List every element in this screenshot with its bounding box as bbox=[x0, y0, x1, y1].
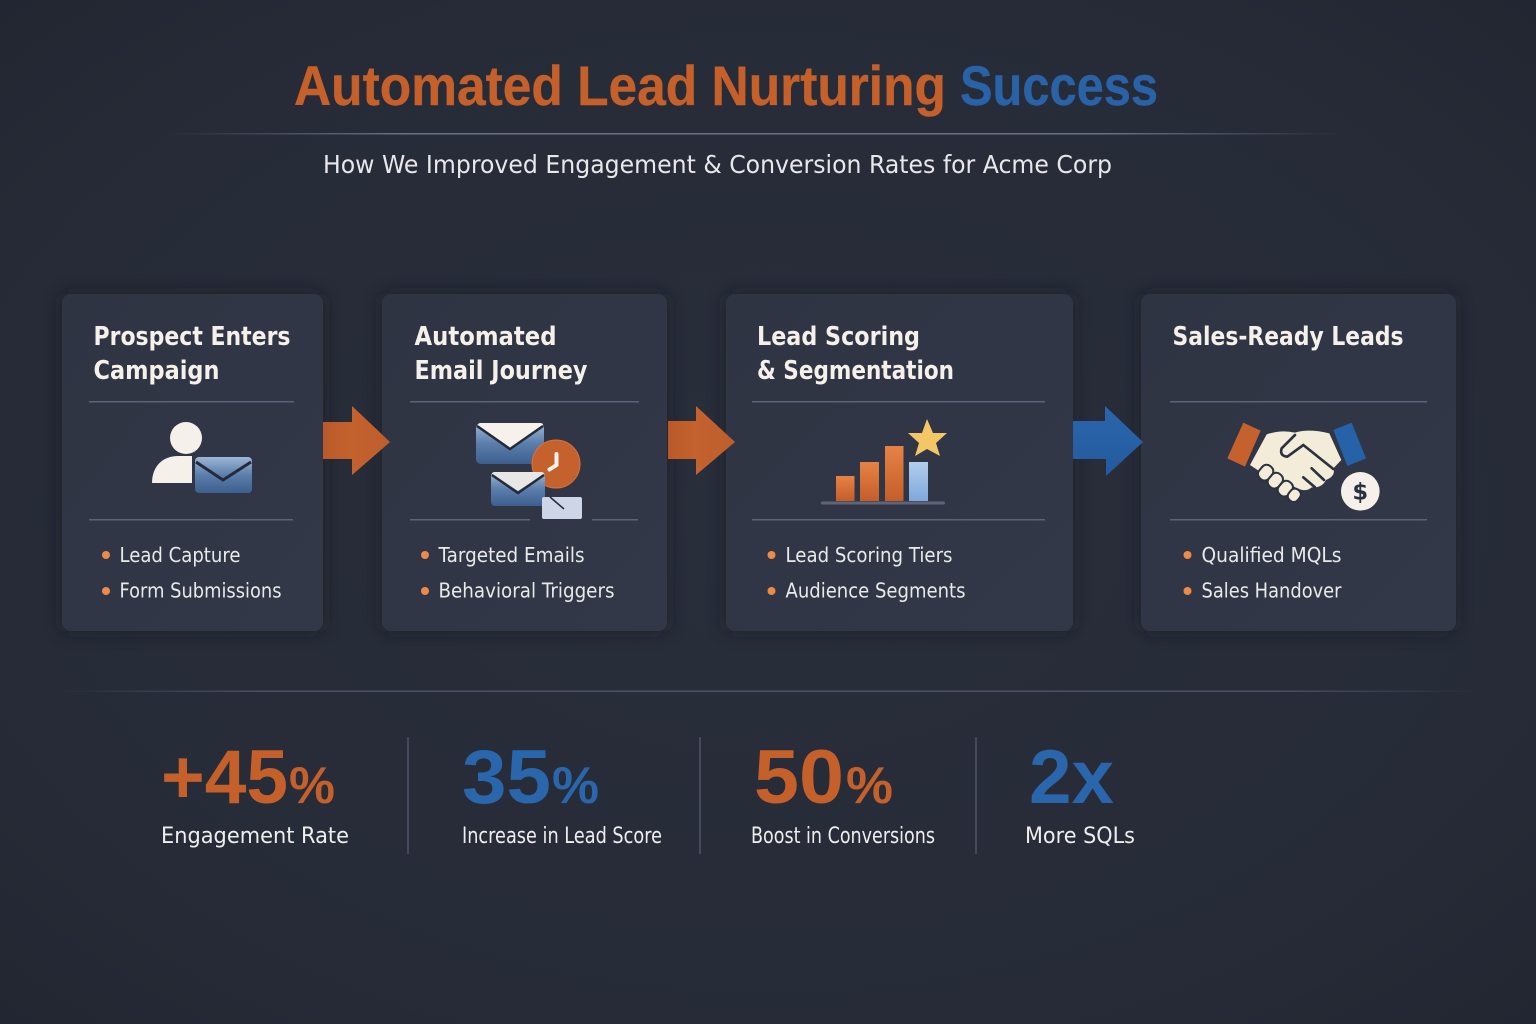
subtitle: How We Improved Engagement & Conversion Rates for Acme Corp bbox=[323, 150, 1112, 179]
heading: Lead Scoring & Segmentation: Lead Scoring bbox=[757, 322, 920, 352]
list: card 3 bullets: Audience Segments bbox=[786, 578, 966, 602]
panel: Sales-Ready Leads bbox=[1141, 294, 1456, 631]
list: card 2 bullets: Targeted Emails bbox=[438, 543, 584, 567]
stat: 35% Increase in Lead Score: Increase in Lead Score bbox=[462, 824, 662, 849]
list: card 1 bullets: Lead Capture bbox=[120, 543, 240, 567]
heading: Automated Email Journey: Email Journey bbox=[414, 356, 588, 386]
stat: +45% Engagement Rate: +45 bbox=[161, 735, 288, 820]
icon: handshake with dollar coin bbox=[1227, 423, 1380, 511]
list: card 2 bullets: Behavioral Triggers bbox=[438, 578, 614, 602]
list: card 3 bullets bbox=[768, 543, 966, 602]
heading: Lead Scoring & Segmentation bbox=[757, 322, 954, 386]
stat: 35% Increase in Lead Score bbox=[462, 735, 662, 849]
stat: 2x More SQLs: 2x bbox=[1029, 735, 1114, 820]
heading: Prospect Enters Campaign: Prospect Enters bbox=[94, 322, 290, 352]
title: Automated Lead Nurturing bbox=[294, 54, 946, 117]
heading: Lead Scoring & Segmentation: & Segmentation bbox=[757, 356, 954, 386]
list: card 4 bullets bbox=[1184, 543, 1342, 602]
stat: +45% Engagement Rate: Engagement Rate bbox=[161, 824, 349, 849]
list: card 1 bullets: Form Submissions bbox=[120, 578, 282, 602]
stat: 2x More SQLs bbox=[1025, 735, 1135, 849]
icon: bar chart with star bbox=[821, 419, 947, 504]
card shadows bbox=[62, 294, 1455, 631]
stat: 50% Boost in Conversions: 50 bbox=[754, 735, 844, 820]
stat: 50% Boost in Conversions: Boost in Conversions bbox=[751, 824, 935, 849]
list: card 4 bullets: Qualified MQLs bbox=[1202, 543, 1342, 567]
stat: 2x More SQLs: More SQLs bbox=[1025, 824, 1135, 849]
title: Success bbox=[960, 54, 1158, 117]
heading: Prospect Enters Campaign: Campaign bbox=[94, 356, 220, 386]
stat: 50% Boost in Conversions: % bbox=[846, 757, 893, 815]
stat: 50% Boost in Conversions bbox=[751, 735, 935, 849]
heading: Automated Email Journey bbox=[414, 322, 588, 386]
icon: handshake with dollar coin: $ bbox=[1352, 480, 1368, 506]
arrow 1 bbox=[323, 406, 390, 475]
list: card 1 bullets bbox=[102, 543, 282, 602]
panel: Lead Scoring & Segmentation bbox=[726, 294, 1073, 631]
stat: 35% Increase in Lead Score: % bbox=[552, 757, 599, 815]
arrow 2 bbox=[668, 406, 735, 475]
stat: 35% Increase in Lead Score: 35 bbox=[462, 735, 551, 820]
heading: Prospect Enters Campaign bbox=[94, 322, 290, 386]
icon: person with envelope bbox=[152, 422, 252, 493]
heading: Sales-Ready Leads: Sales-Ready Leads bbox=[1172, 322, 1404, 352]
arrow 3 bbox=[1073, 406, 1143, 476]
stat: +45% Engagement Rate bbox=[161, 735, 349, 849]
heading: Automated Email Journey: Automated bbox=[414, 322, 556, 352]
panel: Automated Email Journey bbox=[382, 294, 667, 631]
panel: Prospect Enters Campaign bbox=[62, 294, 323, 631]
stat: +45% Engagement Rate: % bbox=[289, 757, 335, 815]
list: card 3 bullets: Lead Scoring Tiers bbox=[786, 543, 952, 567]
icon: emails with clock bbox=[476, 423, 582, 519]
list: card 4 bullets: Sales Handover bbox=[1202, 578, 1342, 602]
list: card 2 bullets bbox=[421, 543, 614, 602]
